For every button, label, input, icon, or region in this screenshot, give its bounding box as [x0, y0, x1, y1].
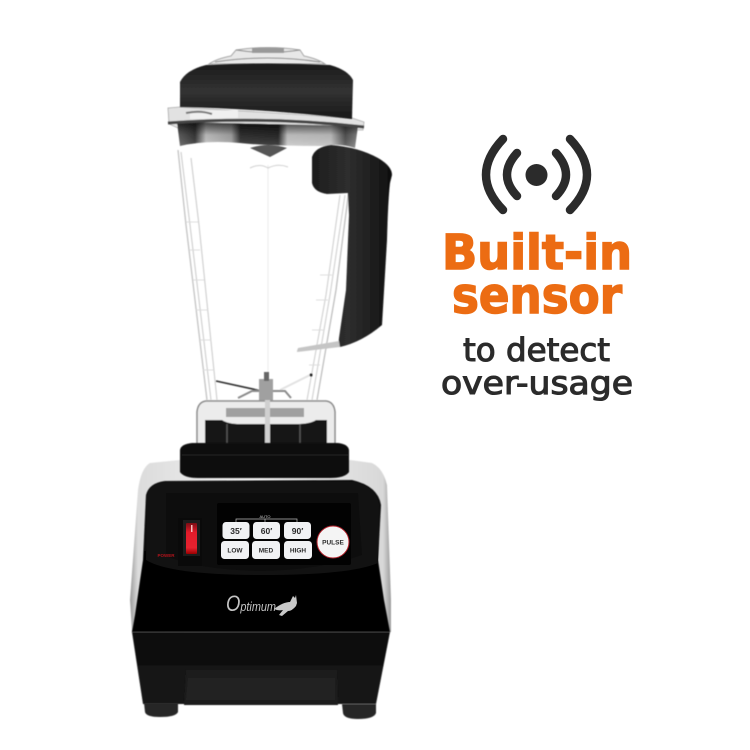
pulse button — [317, 526, 349, 558]
jug — [173, 128, 358, 405]
jug rim with reflections — [168, 107, 364, 157]
optimum logo: Optimum — [226, 591, 276, 616]
text: to detect over-usage: to detect — [463, 331, 610, 369]
text: to detect over-usage: over-usage — [441, 364, 633, 402]
lid cap — [209, 48, 325, 64]
heading: built-in sensor: sensor — [452, 267, 622, 325]
control panel — [146, 482, 379, 575]
blender illustration — [130, 48, 392, 719]
jug base collar — [197, 400, 335, 447]
pulse button: PULSE — [322, 540, 344, 546]
heading: built-in sensor — [442, 225, 632, 325]
buttons: LOW — [227, 548, 243, 554]
buttons: 90′ — [292, 526, 303, 536]
buttons: 60′ — [261, 526, 272, 536]
buttons — [221, 522, 312, 559]
black body — [132, 480, 390, 632]
lower base — [132, 632, 390, 704]
icon: sensor signal — [486, 139, 587, 210]
feet — [144, 703, 376, 719]
lid — [180, 64, 353, 119]
vent recess — [184, 670, 338, 705]
blade assembly — [216, 372, 312, 401]
silver housing — [130, 460, 391, 632]
buttons: MED — [259, 548, 274, 554]
handle — [297, 145, 392, 352]
buttons: 35′ — [230, 526, 242, 536]
display window — [217, 503, 351, 565]
power switch — [178, 518, 202, 566]
heading: built-in sensor: Built-in — [442, 225, 632, 281]
power label: POWER — [157, 553, 175, 558]
auto bracket: AUTO — [259, 514, 271, 519]
buttons: HIGH — [290, 548, 306, 554]
auto bracket — [236, 514, 297, 522]
text: to detect over-usage — [441, 331, 633, 402]
drive collar — [180, 443, 349, 478]
